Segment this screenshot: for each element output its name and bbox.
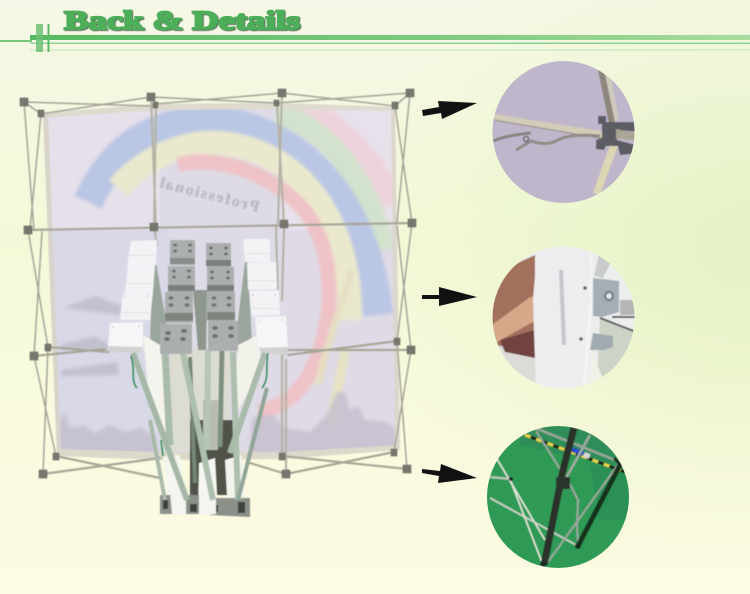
green cords [131, 352, 268, 456]
dark centre [190, 420, 235, 495]
white fabric behind struts [143, 335, 172, 458]
skyline right [250, 392, 398, 458]
faint grey shapes [60, 296, 122, 376]
frame connector hubs [20, 89, 416, 478]
back view photo: frame and banner [20, 89, 416, 478]
banner hem [43, 103, 395, 118]
aluminium struts [133, 350, 267, 500]
title: Back & Details [64, 6, 300, 35]
title rule [0, 24, 750, 52]
detail circle: corner connector and wire [490, 58, 640, 206]
detail circle: black frame on green floor [487, 426, 629, 568]
skyline left [60, 415, 154, 452]
base plates [160, 490, 250, 517]
rainbow arcs [88, 106, 392, 425]
mirrored banner text: Professional [158, 175, 261, 216]
plate rivets and seams [112, 253, 283, 328]
frame rods [24, 93, 412, 478]
lilac gap and rear diagonals [150, 245, 252, 345]
grey blocks [160, 240, 238, 354]
block bottoms and holes [164, 244, 235, 341]
folded stand [108, 239, 288, 517]
arrow: middle [422, 287, 477, 306]
banner fabric [40, 100, 405, 460]
lower fabric [163, 455, 186, 515]
white plates [108, 239, 288, 356]
arrow: bottom [422, 464, 477, 483]
detail circle: hand holding fabric and bracket [490, 244, 638, 392]
arrow: top [422, 101, 477, 119]
